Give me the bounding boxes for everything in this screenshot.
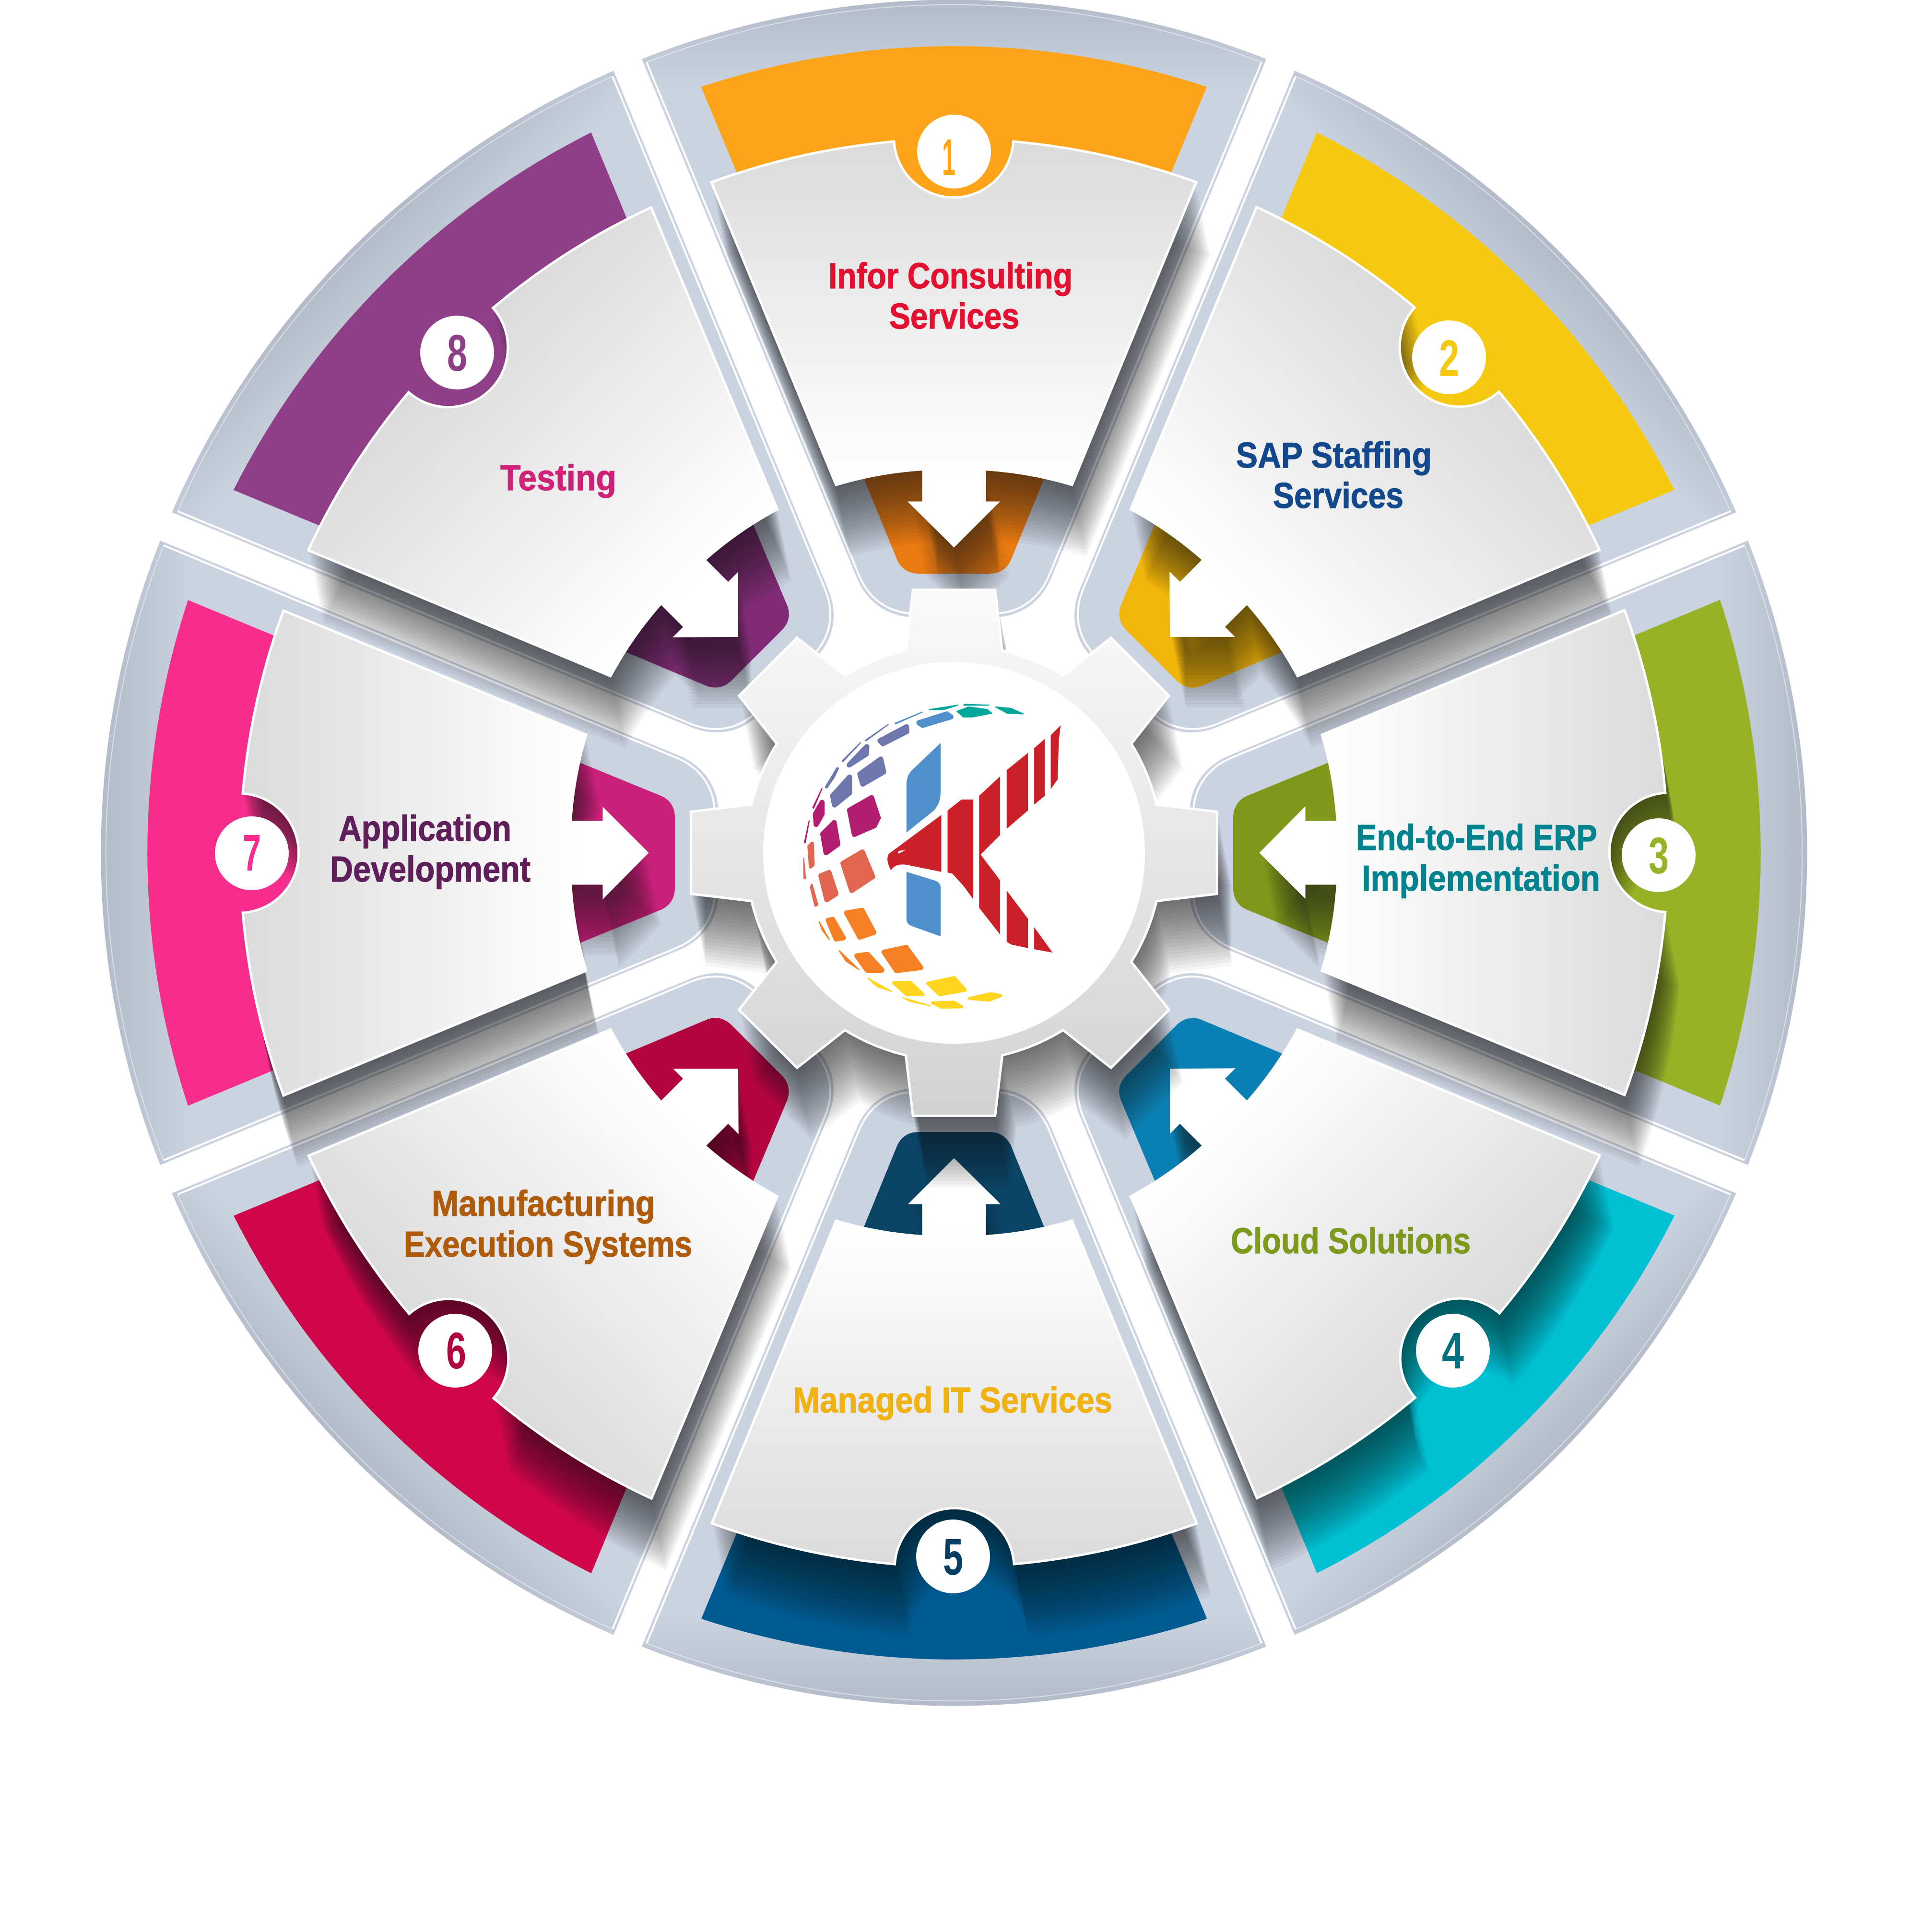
tab 1: [845, 432, 1063, 574]
tab 2: [1074, 478, 1329, 733]
band 4 cyan: [1233, 1131, 1703, 1602]
tab 7: [533, 743, 675, 962]
back plates: eight grey-blue sectors: [101, 0, 1807, 1706]
logo red K: [887, 725, 1061, 953]
tab 4: [1074, 973, 1329, 1228]
label: Manufacturing Execution Systems: Manufacturing: [432, 1183, 655, 1224]
label: End-to-End ERP Implementation: End-to-End ERP: [1356, 817, 1597, 858]
logo blue wing pieces: [907, 743, 941, 936]
label: Infor Consulting Services: [828, 256, 1073, 336]
logo globe magenta tiles: [804, 789, 878, 853]
label: Cloud Solutions: Cloud Solutions: [1231, 1221, 1471, 1261]
logo: globe and K bird: [804, 705, 1061, 1007]
number badge 7: 7: [243, 824, 261, 882]
label: Manufacturing Execution Systems: Execution Systems: [404, 1224, 692, 1264]
tab 3: [1233, 743, 1375, 962]
number badge 4: 4: [1442, 1321, 1464, 1379]
label: SAP Staffing Services: SAP Staffing: [1236, 435, 1432, 475]
label: Infor Consulting Services: Infor Consulting: [828, 256, 1073, 296]
gear cast shadow: [692, 593, 1231, 1188]
logo globe blue tiles: [896, 712, 951, 725]
band 1 orange: [701, 46, 1207, 206]
number badge 6: 6: [446, 1321, 466, 1379]
label: Application Development: Development: [330, 849, 531, 889]
label: SAP Staffing Services: [1236, 435, 1432, 516]
number badge 2: [1412, 320, 1486, 394]
logo globe orange tiles: [819, 910, 921, 970]
label: Application Development: Application: [339, 808, 511, 848]
number badge 5: [916, 1520, 990, 1593]
number badge 3: 3: [1649, 826, 1669, 884]
label: Infor Consulting Services: Services: [889, 296, 1019, 336]
label: Application Development: [330, 808, 531, 889]
band 8 purple: [205, 104, 675, 575]
number badge 1: 1: [942, 128, 955, 186]
band 2 yellow: [1232, 104, 1703, 574]
inner coloured arrow tabs: [533, 432, 1375, 1274]
tab 8: [579, 478, 834, 733]
label: Manufacturing Execution Systems: [404, 1183, 692, 1264]
number badge 8: [420, 316, 494, 389]
logo globe teal tiles: [930, 705, 1023, 717]
long cast shadows of the panels: [244, 145, 1680, 1636]
logo globe yellow tiles: [868, 978, 1001, 1007]
label: End-to-End ERP Implementation: [1356, 817, 1600, 898]
number badge 8: 8: [447, 324, 467, 382]
number badge 6: [418, 1314, 492, 1388]
central gear: [691, 590, 1217, 1116]
band 6 crimson: [205, 1131, 676, 1602]
label: Managed IT Services: Managed IT Services: [793, 1380, 1112, 1420]
logo globe violet tiles: [826, 725, 907, 805]
logo globe salmon tiles: [804, 844, 872, 906]
band 5 blue: [701, 1499, 1207, 1660]
label: Testing: Testing: [500, 458, 616, 498]
number badge 3: [1622, 818, 1696, 892]
number badge 2: 2: [1439, 329, 1459, 387]
band 7 pink: [147, 600, 307, 1106]
label: SAP Staffing Services: Services: [1273, 475, 1403, 516]
number badge 7: [215, 816, 289, 890]
tab 5: [845, 1132, 1063, 1274]
coloured outer bands: [147, 46, 1761, 1660]
band 3 green: [1601, 600, 1761, 1106]
light grey panels with built-in white arrows: [243, 141, 1665, 1564]
label: End-to-End ERP Implementation: Implementation: [1362, 858, 1600, 898]
number badge 5: 5: [943, 1528, 963, 1586]
tab 6: [579, 973, 834, 1228]
number badge 4: [1416, 1314, 1490, 1388]
number badge 1: [917, 115, 991, 188]
